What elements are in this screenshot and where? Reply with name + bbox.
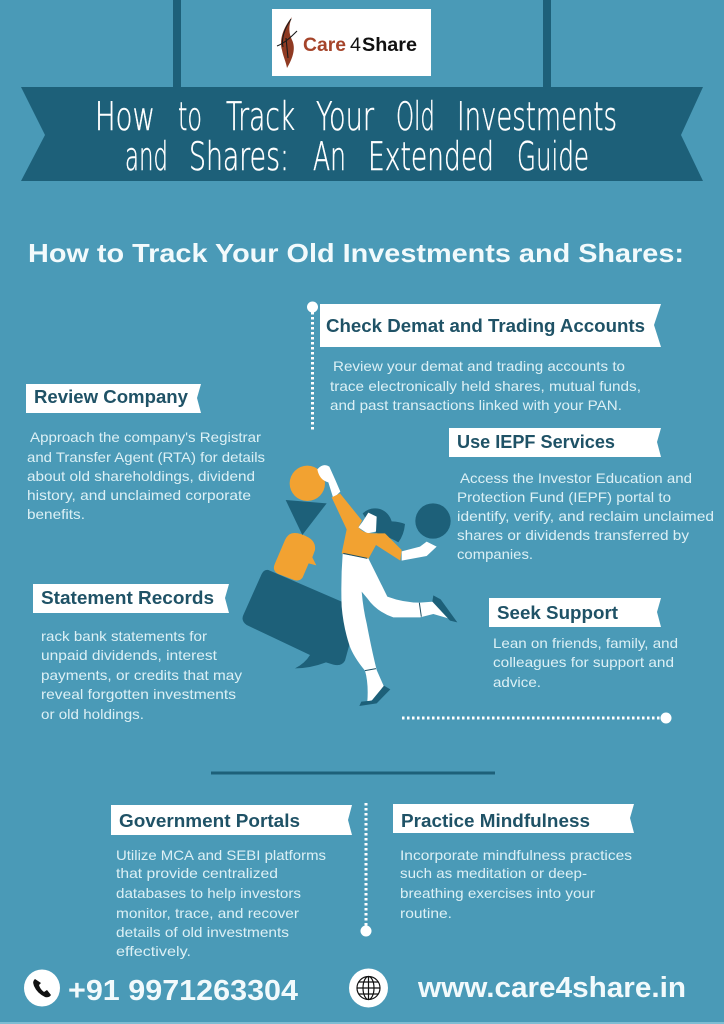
panel: Practice Mindfulness: such as meditation or deep- [400,865,587,881]
title ribbon: How [95,95,155,140]
title ribbon: Old [396,95,435,140]
panel: Seek Support: advice. [493,674,541,690]
title ribbon [21,87,703,181]
icon: speech bubble [243,570,351,668]
panel: Government Portals [111,805,352,959]
panel: Statement Records: reveal forgotten investments [41,686,236,702]
panel: Review Company [26,384,265,522]
panel: Statement Records: payments, or credits that may [41,667,242,683]
panel: Practice Mindfulness: breathing exercises into your [400,885,595,901]
divider [211,772,495,774]
illustration: woman balancing shapes [243,465,457,706]
panel: Government Portals: details of old investments [116,924,289,940]
figure: woman [317,465,457,706]
icon: orange circle [290,466,325,501]
panel: Practice Mindfulness: Incorporate mindfulness practices [400,847,632,863]
title ribbon: Shares: [189,135,289,180]
panel: Statement Records: Statement Records [41,587,214,608]
panel: Use IEPF Services: identify, verify, and reclaim unclaimed [457,508,714,524]
panel: Practice Mindfulness [393,804,634,921]
title ribbon: Your [316,95,374,140]
title ribbon: Guide [517,135,589,180]
panel: Use IEPF Services: Access the Investor Education and [460,470,692,486]
icon: phone [24,970,60,1006]
panel: Use IEPF Services: Protection Fund (IEPF) portal to [457,489,671,505]
phone number: +91 9971263304 [68,975,298,1007]
panel: Review Company: and Transfer Agent (RTA) for details [27,449,265,465]
panel: Statement Records: or old holdings. [41,706,144,722]
panel: Check Demat and Trading Accounts: trace electronically held shares, mutual funds, [330,378,641,394]
panel: Use IEPF Services: Use IEPF Services [457,431,615,452]
panel: Use IEPF Services [449,428,714,562]
panel: Seek Support: Lean on friends, family, and [493,635,678,651]
title ribbon: Track [226,95,295,140]
panel: Use IEPF Services: shares or dividends transferred by [457,527,689,543]
panel: Practice Mindfulness: routine. [400,905,452,921]
panel: Government Portals: Utilize MCA and SEBI platforms [116,847,326,863]
panel: Statement Records: unpaid dividends, interest [41,647,217,663]
dotted connector: bottom [360,803,372,936]
logo: Care 4 Share [272,9,431,76]
panel: Government Portals: Government Portals [119,810,300,831]
icon: orange speech shape [274,533,316,580]
panel: Seek Support: colleagues for support and [493,654,674,670]
logo: Care 4 Share: 4 [350,35,361,56]
title ribbon: to [178,95,202,140]
panel: Government Portals: that provide centralized [116,865,278,881]
panel: Government Portals: effectively. [116,943,191,959]
icon: dark ball [415,503,451,539]
panel: Review Company: about old shareholdings, dividend [27,468,255,484]
panel: Government Portals: monitor, trace, and recover [116,905,299,921]
panel: Review Company: benefits. [27,506,85,522]
banner hanging bars [173,0,551,90]
panel: Review Company: history, and unclaimed corporate [27,487,251,503]
section heading: How to Track Your Old Investments and Shares: [28,238,684,268]
panel: Use IEPF Services: companies. [457,546,533,562]
panel: Check Demat and Trading Accounts: Check Demat and Trading Accounts [326,315,645,336]
panel: Government Portals: databases to help investors [116,885,301,901]
logo: Care 4 Share: Share [362,35,417,56]
logo: Care 4 Share: Care [303,35,346,56]
website: www.care4share.in [417,972,686,1004]
panel: Check Demat and Trading Accounts: and past transactions linked with your PAN. [330,397,622,413]
title ribbon: An [313,135,346,180]
panel: Review Company: Review Company [34,386,189,407]
dotted connector: right [402,712,672,724]
panel: Practice Mindfulness: Practice Mindfulness [401,810,590,831]
panel: Review Company: Approach the company's Registrar [30,429,261,445]
panel: Seek Support [489,598,678,690]
title ribbon: Extended [368,135,494,180]
panel: Check Demat and Trading Accounts: Review your demat and trading accounts to [333,358,625,374]
panel: Statement Records [33,584,242,722]
panel: Seek Support: Seek Support [497,602,618,623]
panel: Check Demat and Trading Accounts [320,304,661,413]
title ribbon: Investments [457,95,617,140]
title ribbon: and [125,135,168,180]
panel: Statement Records: rack bank statements for [41,628,207,644]
icon: globe [349,968,388,1008]
icon: dark triangle [286,500,327,535]
dotted connector: top [307,302,318,431]
